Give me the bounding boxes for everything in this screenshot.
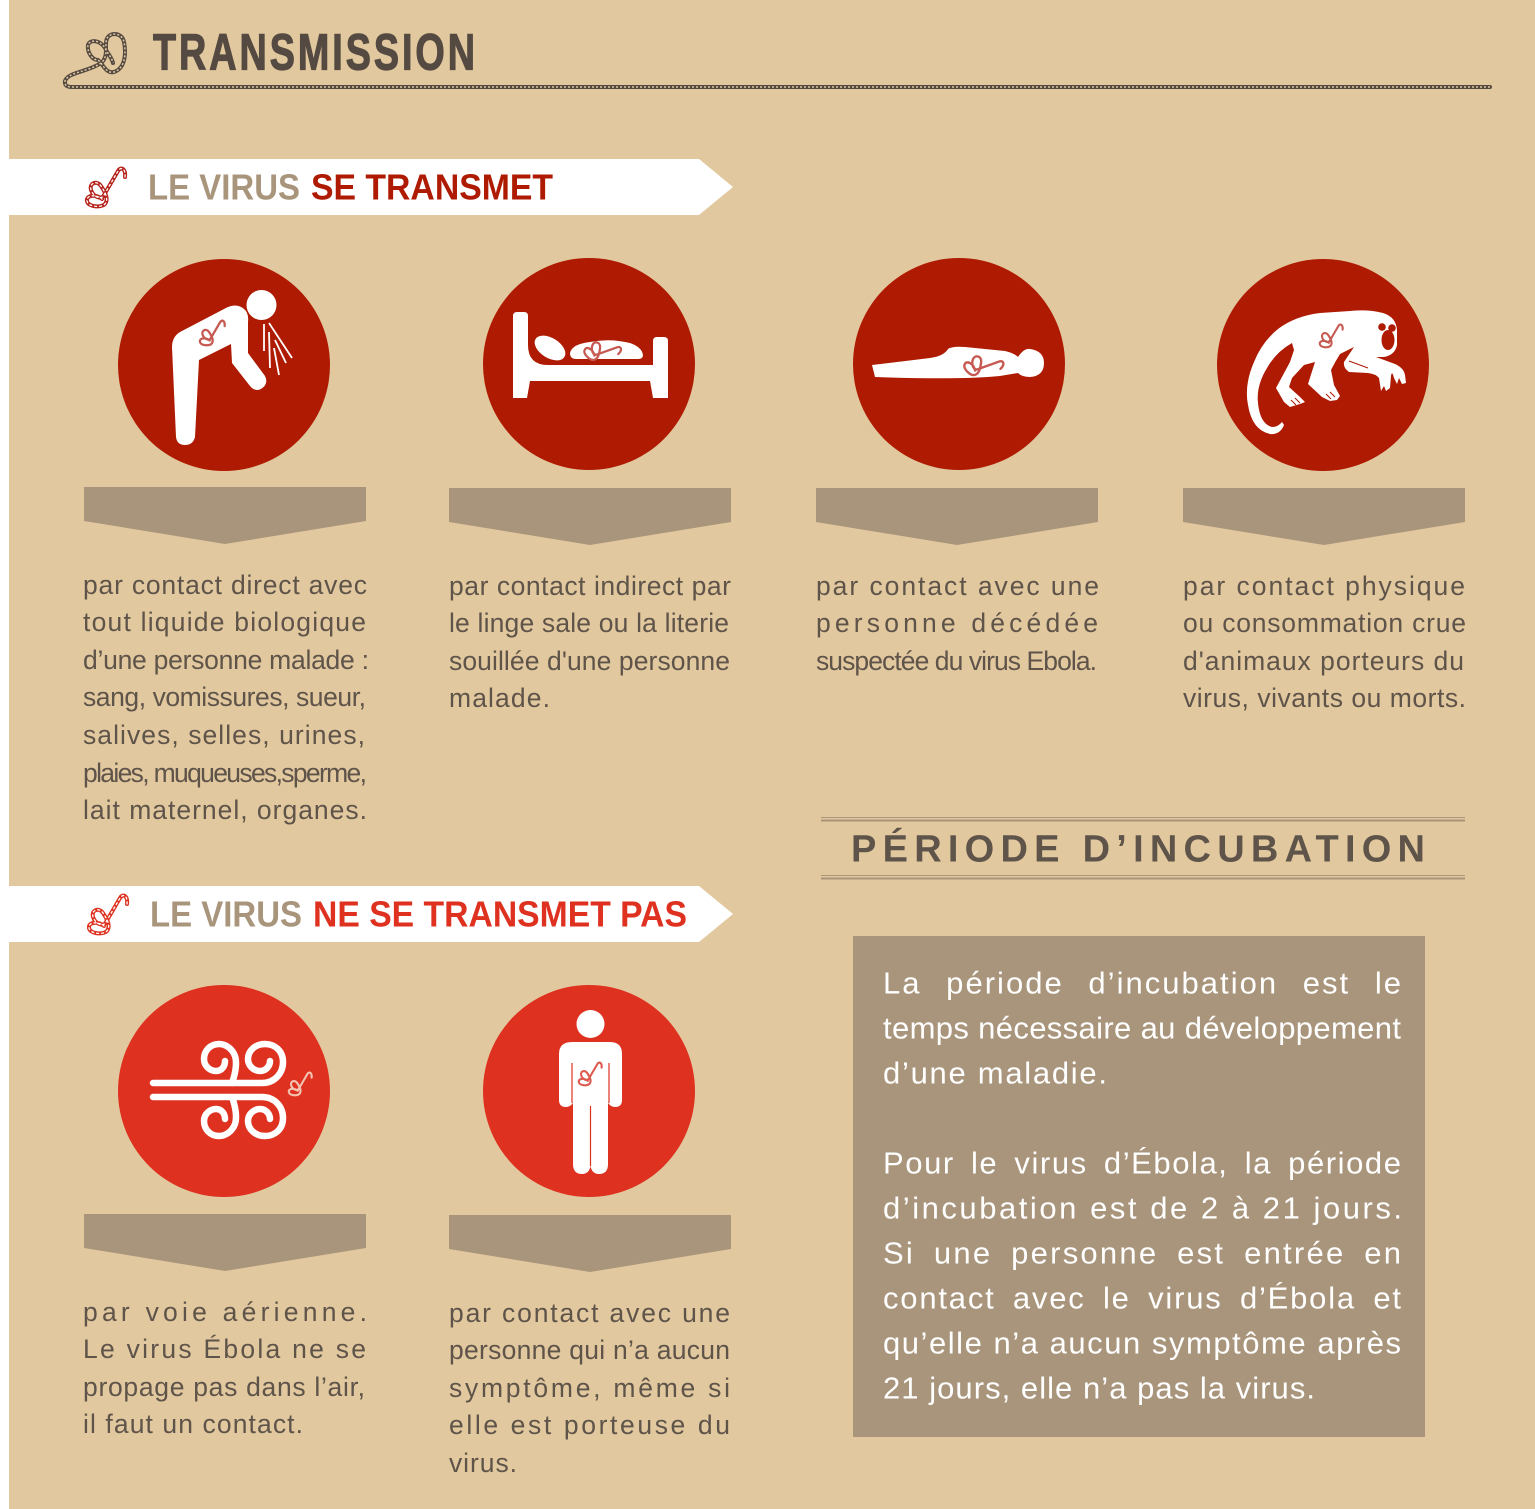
text block: plaies, muqueuses,sperme, <box>83 758 367 788</box>
icon: rope virus and rule <box>65 34 1490 87</box>
text block: par contact avec une <box>449 1298 730 1328</box>
text block: lait maternel, organes. <box>83 795 367 825</box>
text block: malade. <box>449 683 550 713</box>
panel: incubation description: d’une maladie. <box>883 1056 1107 1090</box>
text block: Le virus Ébola ne se <box>83 1334 366 1364</box>
text block: sang, vomissures, sueur, <box>83 682 366 712</box>
text block: virus. <box>449 1448 517 1478</box>
text block <box>83 570 369 825</box>
text block: par contact physique <box>1183 571 1465 601</box>
text block: salives, selles, urines, <box>83 720 365 750</box>
panel: incubation description: d’incubation est de 2 à 21 jours. <box>883 1190 1402 1226</box>
arrow <box>449 1215 731 1272</box>
panel: incubation description <box>853 936 1425 1437</box>
panel: airborne <box>83 985 367 1439</box>
text block: le linge sale ou la literie <box>449 608 729 638</box>
banner: le virus ne se transmet pas <box>9 886 733 942</box>
panel: animals <box>1183 259 1466 713</box>
text block: elle est porteuse du <box>449 1410 730 1440</box>
text block: ou consommation crue <box>1183 608 1466 638</box>
panel: incubation description: La période d’incubation est le <box>883 966 1401 1000</box>
text block: virus, vivants ou morts. <box>1183 683 1466 713</box>
heading: LE VIRUS <box>148 166 300 208</box>
panel: incubation description: 21 jours, elle n’a pas la virus. <box>883 1370 1315 1406</box>
icon: wind <box>118 985 330 1197</box>
heading: SE TRANSMET <box>311 166 553 208</box>
text block: personne décédée <box>816 608 1098 638</box>
icon: virus <box>87 169 125 206</box>
text block: propage pas dans l’air, <box>83 1372 365 1402</box>
text block <box>816 571 1099 676</box>
arrow <box>84 487 366 544</box>
panel: incubation description: Pour le virus d’Ébola, la période <box>883 1146 1401 1180</box>
text block <box>449 1298 730 1478</box>
heading: période d'incubation <box>821 818 1465 878</box>
text block <box>449 571 731 713</box>
icon: virus <box>89 896 127 933</box>
heading: période d'incubation: PÉRIODE D’INCUBATION <box>851 826 1425 870</box>
panel: incubation description: Si une personne est entrée en <box>883 1236 1401 1270</box>
panel: incubation description: contact avec le virus d’Ébola et <box>883 1280 1401 1316</box>
arrow <box>449 488 731 545</box>
text block: personne qui n’a aucun <box>449 1335 730 1365</box>
banner: le virus se transmet <box>9 159 733 215</box>
text block: par contact direct avec <box>83 570 367 600</box>
text block <box>83 1297 367 1439</box>
panel: incubation description: temps nécessaire au développement <box>883 1010 1401 1046</box>
icon: monkey <box>1217 259 1429 471</box>
panel: direct contact <box>83 259 369 825</box>
text block: tout liquide biologique <box>83 607 366 637</box>
icon: bed <box>483 258 695 470</box>
heading: LE VIRUS <box>150 894 302 934</box>
panel: indirect contact <box>449 258 731 713</box>
text block: par contact indirect par <box>449 571 731 601</box>
arrow <box>84 1214 366 1271</box>
title: TRANSMISSION <box>153 24 478 80</box>
panel: asymptomatic person <box>449 985 731 1478</box>
text block: d’une personne malade : <box>83 645 369 675</box>
panel: deceased person <box>816 258 1099 676</box>
text block: suspectée du virus Ebola. <box>816 646 1097 676</box>
text block: souillée d'une personne <box>449 646 730 676</box>
text block: symptôme, même si <box>449 1373 730 1403</box>
icon: standing person <box>483 985 695 1197</box>
text block: par voie aérienne. <box>83 1297 367 1327</box>
arrow <box>1183 488 1465 545</box>
text block: par contact avec une <box>816 571 1099 601</box>
panel: incubation description: qu’elle n’a aucun symptôme après <box>883 1326 1401 1360</box>
text block: d'animaux porteurs du <box>1183 646 1464 676</box>
heading: NE SE TRANSMET PAS <box>313 894 687 934</box>
icon: lying body <box>853 258 1065 470</box>
arrow <box>816 488 1098 545</box>
icon: vomiting person <box>118 259 330 471</box>
text block: il faut un contact. <box>83 1409 303 1439</box>
text block <box>1183 571 1466 713</box>
